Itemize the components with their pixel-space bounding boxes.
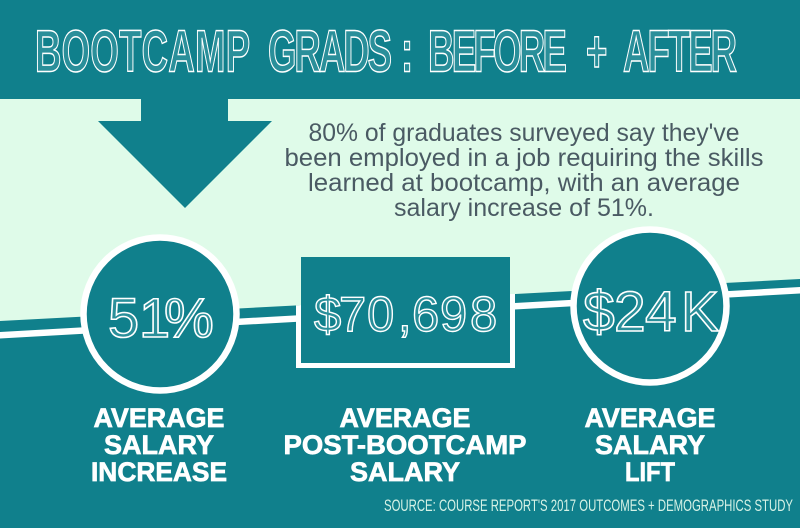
title: GRADS xyxy=(268,20,392,85)
label: average salary lift xyxy=(584,403,716,487)
label: average salary lift: SALARY xyxy=(595,430,705,460)
stat box: $70,698 xyxy=(296,257,515,368)
label: average salary lift: AVERAGE xyxy=(584,403,716,433)
stat circle: $24K: $24K xyxy=(583,280,719,344)
title: BEFORE xyxy=(428,20,567,85)
intro text block xyxy=(284,119,764,222)
title: AFTER xyxy=(623,20,737,85)
stat circle: $24K xyxy=(574,230,726,382)
intro text block: salary increase of 51%. xyxy=(394,194,654,222)
bottom teal band xyxy=(0,279,800,528)
arrow pointing down xyxy=(98,99,272,208)
label: average salary increase xyxy=(91,403,227,487)
intro text block: 80% of graduates surveyed say they've xyxy=(308,119,740,147)
label: average post-bootcamp salary: POST-BOOTCAMP xyxy=(284,430,526,460)
label: average salary increase: AVERAGE xyxy=(94,403,224,433)
title: BOOTCAMP xyxy=(35,20,250,85)
label: average post-bootcamp salary: SALARY xyxy=(350,457,460,487)
title banner xyxy=(0,0,800,99)
stat circle: 51%: 51% xyxy=(108,286,214,349)
intro text block: been employed in a job requiring the skills xyxy=(284,144,764,172)
title xyxy=(35,20,737,85)
title: + xyxy=(586,20,607,85)
label: average salary lift: LIFT xyxy=(625,457,675,487)
stat circle: 51% xyxy=(84,238,236,390)
label: average post-bootcamp salary xyxy=(284,403,526,487)
title: : xyxy=(401,20,413,85)
diagonal white line xyxy=(0,287,800,338)
label: average post-bootcamp salary: AVERAGE xyxy=(340,403,470,433)
stat box: $70,698: $70,698 xyxy=(314,288,497,342)
label: average salary increase: INCREASE xyxy=(91,457,227,487)
intro text block: learned at bootcamp, with an average xyxy=(308,169,740,197)
label: average salary increase: SALARY xyxy=(104,430,214,460)
